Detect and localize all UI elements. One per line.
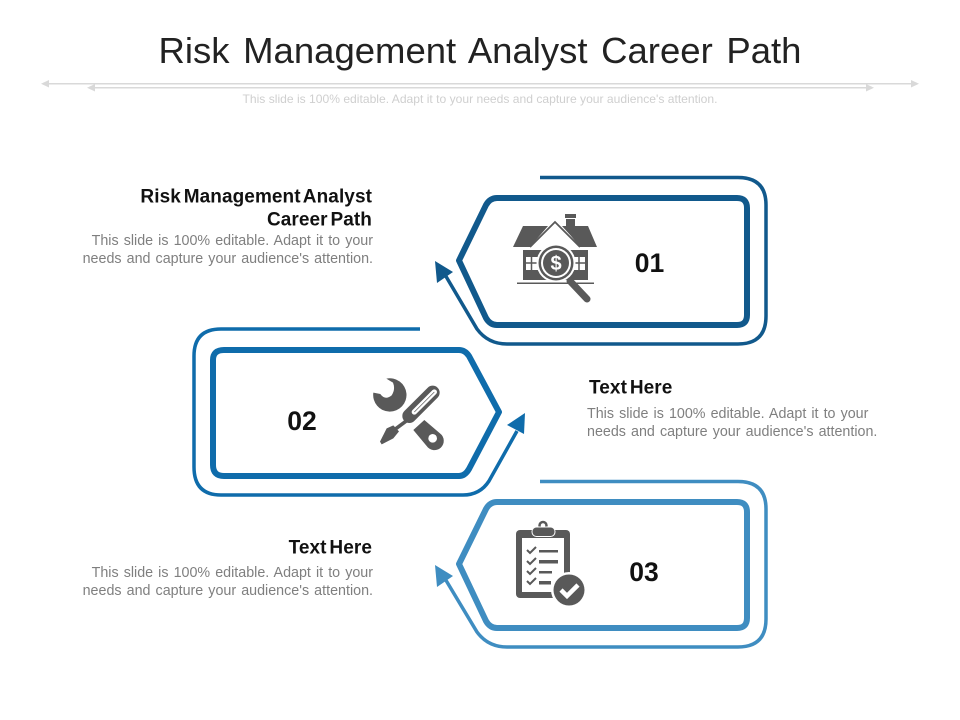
text block: risk management: Career Path [267, 210, 372, 230]
panel 03 [435, 482, 766, 647]
panel 02 inner frame [213, 350, 499, 476]
text block: text here bottom: Text Here [289, 538, 372, 558]
icon: house with magnifier [513, 214, 597, 299]
panel 03 outer arrow line [444, 482, 766, 647]
text block: risk management: needs and capture your audience's attention. [83, 251, 373, 267]
header double arrow divider [41, 80, 919, 92]
panel 01 inner frame [459, 198, 747, 325]
number 03: 03 [629, 557, 659, 587]
text block: text here middle: needs and capture your audience's attention. [587, 424, 877, 440]
text block: text here bottom: This slide is 100% editable. Adapt it to your [92, 565, 373, 581]
title: Risk Management Analyst Career Path [159, 30, 801, 71]
icon: house with magnifier: $ [550, 253, 562, 275]
icon: wrench and screwdriver [373, 378, 444, 450]
number 02: 02 [287, 406, 317, 436]
text block: risk management: Risk Management Analyst [140, 186, 373, 208]
panel 01 outer arrow line [444, 178, 766, 344]
text block: text here bottom [83, 538, 373, 599]
panel 01 [435, 178, 766, 344]
panel 01 arrowhead [435, 261, 453, 283]
text block: risk management: This slide is 100% editable. Adapt it to your [92, 233, 373, 249]
text block: text here middle: This slide is 100% editable. Adapt it to your [587, 406, 869, 422]
icon: clipboard with check [516, 522, 587, 608]
panel 02 [194, 329, 525, 495]
text block: text here middle [587, 378, 877, 440]
panel 02 arrowhead [507, 413, 525, 434]
panel 02 outer arrow line [194, 329, 517, 495]
panel 03 arrowhead [435, 565, 453, 587]
text block: text here bottom: needs and capture your audience's attention. [83, 583, 373, 599]
text block: text here middle: Text Here [589, 378, 672, 398]
panel 03 inner frame [459, 502, 747, 628]
number 01: 01 [635, 248, 664, 278]
subtitle: This slide is 100% editable. Adapt it to your needs and capture your audience's attention. [242, 92, 718, 106]
text block: risk management [83, 186, 373, 267]
